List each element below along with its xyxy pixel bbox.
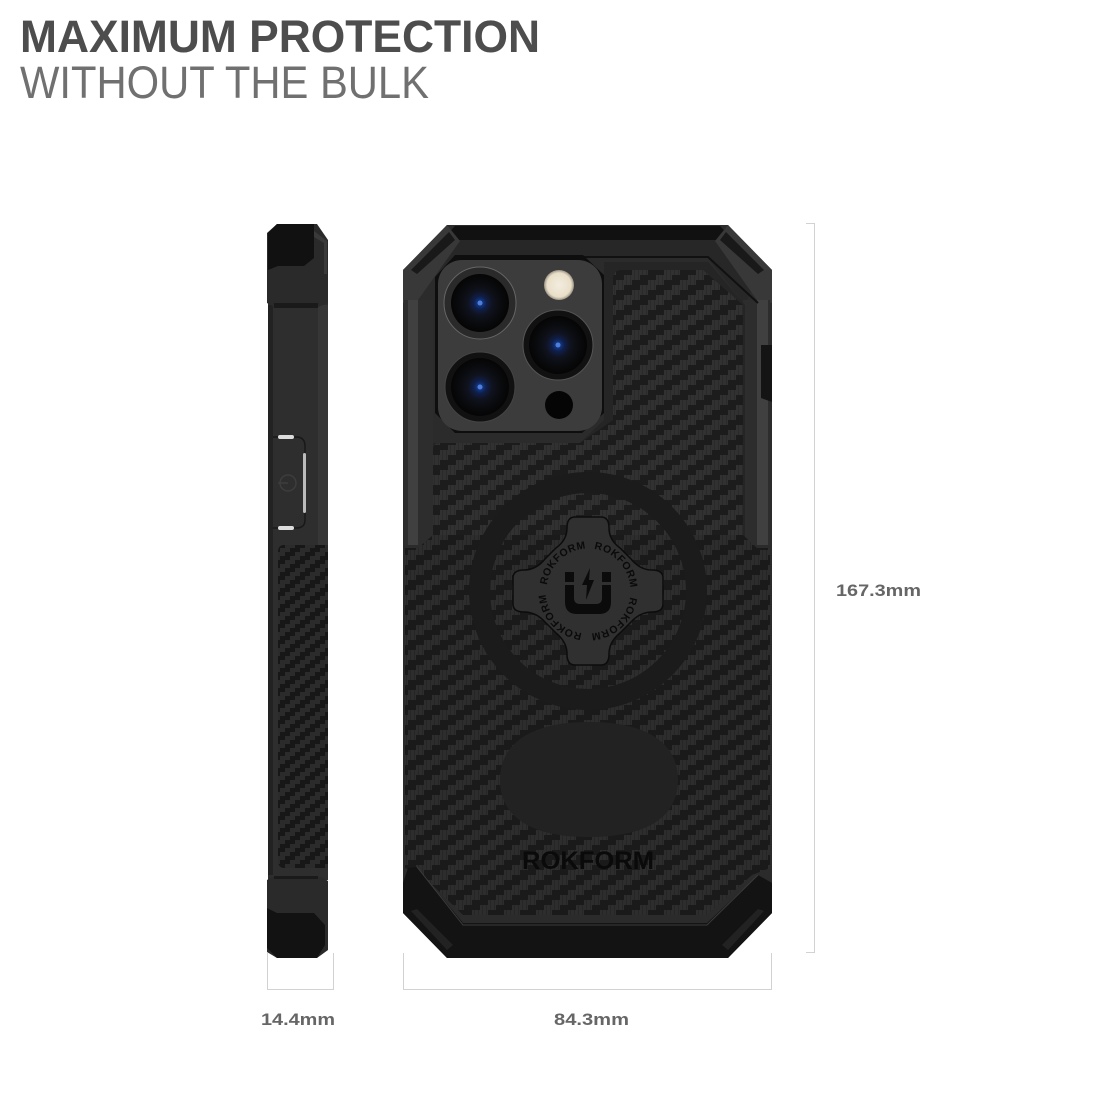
mount lettering: ROKFORM (540, 542, 585, 584)
lower carbon panel (405, 535, 770, 915)
mount (512, 516, 664, 666)
upper panel surround (433, 262, 745, 545)
camera module (435, 255, 604, 433)
button highlight vertical (303, 453, 306, 513)
lens: top (444, 267, 516, 339)
heading: maximum protection: MAXIMUM PROTECTION (20, 11, 540, 62)
side top right vent (314, 231, 327, 274)
dimension: depth bracket (268, 953, 334, 990)
label: depth: 14.4mm (261, 1010, 335, 1029)
top-right corner vent (720, 232, 764, 274)
side case body (268, 300, 328, 880)
top dark strip (442, 226, 733, 240)
sensor hole (545, 391, 573, 419)
mount cross shape (513, 517, 663, 665)
panel dark outline (583, 257, 758, 303)
top-left corner vent (411, 232, 455, 274)
label: width: 84.3mm (554, 1010, 629, 1029)
button highlight bottom (278, 526, 294, 530)
side slot right (761, 345, 772, 402)
upper carbon panel (433, 270, 743, 545)
icon: power (278, 475, 296, 491)
lens: bottom (445, 352, 515, 422)
side right rail (318, 305, 328, 545)
side carbon texture (278, 545, 328, 868)
mount lettering (538, 542, 638, 640)
dimension: height bracket (806, 224, 814, 952)
label: height: 167.3mm (836, 581, 921, 600)
button highlight top (278, 435, 294, 439)
bottom-right corner vent (722, 909, 764, 950)
title (20, 11, 540, 108)
top-left corner bumper (403, 225, 460, 303)
case outline body (403, 225, 772, 958)
bottom bumper ridge (417, 867, 758, 925)
camera surround (435, 255, 604, 433)
top bumper (405, 240, 760, 305)
right side rail (743, 300, 770, 545)
mount lettering: ROKFORM (538, 595, 582, 640)
side bottom band (274, 876, 318, 879)
heading: without the bulk: WITHOUT THE BULK (20, 57, 429, 108)
lens: right (523, 310, 593, 380)
left side rail (404, 300, 433, 545)
logo: rokform: ROKFORM (522, 847, 654, 875)
side top cap (268, 224, 314, 270)
side bottom dark cap (267, 908, 325, 958)
bottom bumper (403, 867, 772, 958)
side top bumper (267, 224, 328, 307)
side left rail (268, 305, 273, 875)
side buttons (273, 435, 306, 530)
side button outline (273, 437, 305, 528)
leather patch (500, 722, 678, 837)
side top dark band (274, 303, 318, 308)
mount lettering: ROKFORM (592, 598, 637, 640)
back view of phone case (403, 225, 772, 958)
magnetic ring (480, 482, 696, 700)
dimension: width bracket (404, 953, 772, 990)
camera plate (438, 260, 602, 431)
side bottom bumper (267, 877, 328, 958)
mount lettering: ROKFORM (594, 542, 638, 587)
flash (544, 270, 574, 300)
side view of phone case (267, 224, 328, 958)
icon: magnet with bolt (565, 568, 611, 614)
right side highlight (757, 300, 768, 545)
left side highlight (408, 300, 418, 545)
top-right corner bumper (715, 225, 772, 303)
bottom-left corner vent (411, 909, 453, 950)
